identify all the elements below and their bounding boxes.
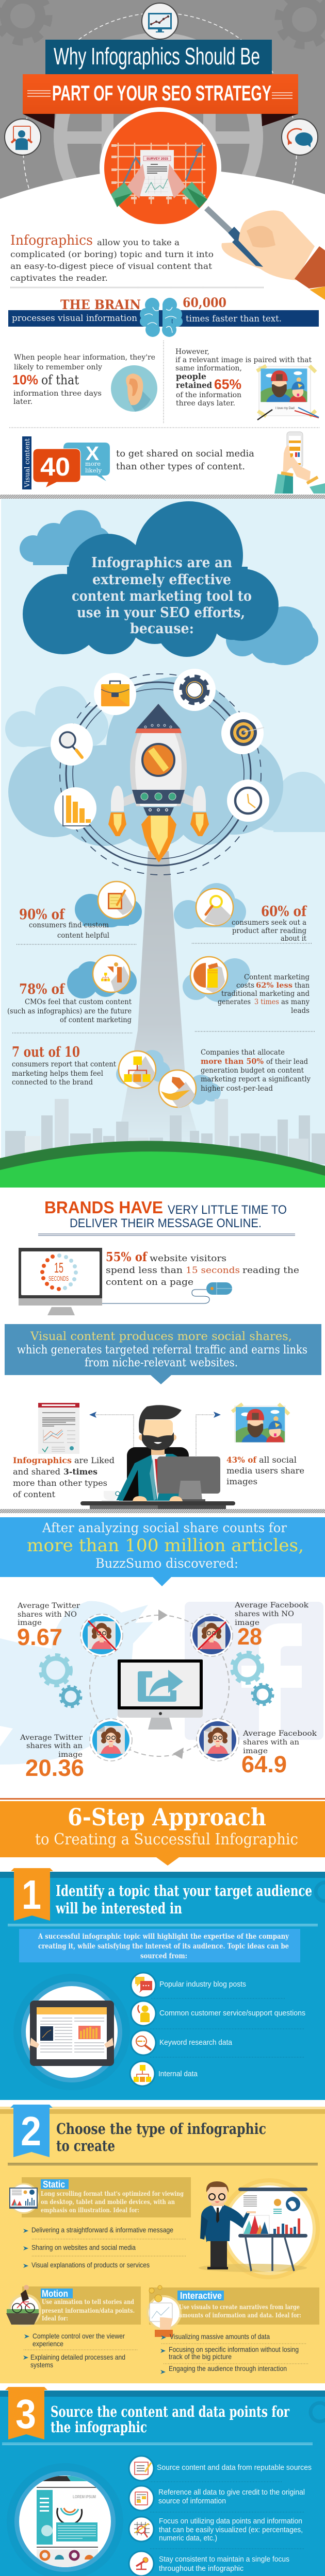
motion card: Use animation to tell stories and	[42, 2298, 134, 2306]
icon: chart magnifier	[134, 2522, 150, 2537]
interactive card: Interactive	[180, 2291, 222, 2301]
globe	[54, 33, 263, 180]
visual content 40x stat	[22, 436, 254, 489]
interactive card	[147, 2285, 319, 2337]
retention 65% text: same information,	[175, 364, 242, 372]
step 1 intro box: sourced from:	[140, 1952, 187, 1960]
infographics liked text: of content	[13, 1490, 56, 1499]
share counts: Average Twitter	[20, 1734, 83, 1742]
city skyline	[5, 1099, 325, 1167]
55% stat text: reading the	[242, 1265, 299, 1276]
stat: more than 50% budget: marketing report a significantly	[201, 1075, 311, 1083]
twitter and facebook watermarks	[0, 1601, 323, 1765]
step 3 panel	[0, 2387, 325, 2576]
stat: more than 50% budget: Companies that allocate	[201, 1048, 285, 1057]
icon: keyword magnifier	[136, 2036, 151, 2050]
static infographic card: Long scrolling format that's optimized for viewing	[41, 2190, 184, 2197]
intro paragraph: an easy-to-digest piece of visual content that	[10, 261, 213, 271]
stat: 62% less cost: 3 times	[254, 998, 279, 1006]
cloud heading: because:	[130, 621, 194, 637]
stat: 60% seek product: consumers seek out a	[232, 919, 306, 927]
icon: chat	[135, 1977, 152, 1993]
icon: gear	[173, 669, 216, 711]
BuzzSumo banner: more than 100 million articles,	[27, 1535, 304, 1556]
rocket body	[130, 704, 187, 806]
ribbon number 2	[10, 2105, 53, 2157]
static infographic card	[8, 2177, 191, 2217]
infographics liked text: Infographics	[13, 1455, 72, 1465]
list: topic sources: Internal data	[158, 2070, 198, 2078]
cloud and icon	[75, 882, 142, 927]
stat: more than 50% budget: of their lead	[266, 1058, 308, 1066]
icon: person at screen	[5, 119, 41, 155]
motion card	[6, 2285, 141, 2327]
share counts: Average Twitter	[17, 1602, 80, 1610]
step 1 panel	[0, 1868, 325, 2100]
intro paragraph: captivates the reader.	[10, 273, 108, 283]
rocket	[108, 704, 209, 862]
BuzzSumo banner: After analyzing social share counts for	[42, 1520, 287, 1535]
stat: 7 out of 10: consumers report that content	[12, 1060, 116, 1069]
BuzzSumo banner	[0, 1517, 325, 1586]
icon: bar chart	[54, 787, 96, 829]
visual content 40x stat: likely	[85, 467, 102, 474]
the brain stat: times faster than text.	[186, 314, 282, 324]
step 3 heading: the infographic	[51, 2418, 147, 2436]
stat: 78% CMOs: of content marketing	[60, 1016, 132, 1024]
motion and interactive bullets: systems	[30, 2361, 53, 2369]
43% text: 43% of	[226, 1455, 257, 1465]
motion and interactive bullets: Visualizing massive amounts of data	[170, 2332, 270, 2341]
list: topic sources	[130, 1973, 305, 2086]
social shares banner: from niche-relevant websites.	[85, 1357, 238, 1369]
icon: support person	[138, 2005, 150, 2022]
list: topic sources: Keyword research data	[159, 2038, 233, 2047]
55% stat text: 15 seconds	[186, 1265, 240, 1276]
infographics liked text: 3-times	[63, 1467, 98, 1477]
document illustration: LOREM IPSUM	[73, 2495, 96, 2499]
motion and interactive bullets	[23, 2332, 308, 2374]
share counts: image	[58, 1751, 83, 1759]
green hill	[0, 1141, 325, 1188]
motion and interactive bullets: experience	[32, 2340, 63, 2348]
the brain stat: processes visual information	[12, 313, 137, 324]
list: sourcing tips: Reference all data to give credit to the original	[158, 2488, 305, 2497]
stat: more than 50% budget: generation budget on content	[201, 1066, 304, 1075]
retention 10% text	[12, 353, 155, 406]
stat: 62% less cost: than	[295, 981, 310, 990]
list: sourcing tips: source of information	[158, 2497, 226, 2505]
main cloud	[23, 501, 279, 657]
title banner: blue	[45, 40, 272, 74]
orbit rings	[60, 674, 261, 875]
stat: 90% custom content: content helpful	[57, 931, 109, 940]
stat: 62% less cost: costs	[236, 981, 254, 990]
list: sourcing tips: Stay consistent to maintain a single focus	[159, 2555, 289, 2564]
icon: family photo	[232, 1404, 289, 1443]
stat: 62% less cost: traditional marketing and	[221, 990, 310, 998]
static bullets: Delivering a straightforward & informative message	[31, 2226, 173, 2234]
icon: magnifier	[51, 723, 93, 766]
stat: 78% CMOs	[7, 955, 137, 1024]
list: sourcing tips: Source content and data from reputable sources	[157, 2463, 312, 2472]
share counts: shares with an	[243, 1738, 299, 1747]
portrait: twitter with image	[90, 1719, 132, 1761]
ribbon number 1: 1	[22, 1872, 41, 1918]
step 3 heading	[51, 2403, 290, 2436]
55% stat text: 55% of	[106, 1249, 148, 1264]
retention 10% text: later.	[13, 398, 32, 406]
43% text	[226, 1455, 304, 1486]
the brain stat: THE BRAIN	[60, 297, 141, 312]
retention 65% text: retained	[176, 380, 212, 390]
white hill	[0, 169, 325, 309]
infographics liked text: and shared	[13, 1467, 60, 1477]
title banner folds	[23, 114, 298, 129]
motion card: present information/data points.	[42, 2307, 135, 2314]
list: sourcing tips: throughout the infographic	[159, 2564, 243, 2573]
share counts: 9.67	[17, 1624, 62, 1650]
retention 10% text: likely to remember only	[14, 363, 102, 371]
motion card: Ideal for:	[42, 2314, 68, 2322]
intro paragraph: Infographics	[10, 233, 93, 248]
ribbon number 1	[11, 1868, 53, 1921]
icon: briefcase	[94, 673, 136, 715]
list: topic sources: Common customer service/support questions	[159, 2009, 305, 2018]
share counts: 64.9	[241, 1751, 287, 1777]
social shares banner	[5, 1324, 321, 1384]
stat: 60% seek product: 60% of	[261, 904, 307, 920]
cloud heading: content marketing tool to	[72, 588, 252, 604]
stat: 60% seek product	[174, 883, 307, 943]
hands holding paper	[126, 164, 186, 198]
stat: 62% less cost: leads	[291, 1007, 310, 1015]
intro paragraph: allow you to take a	[97, 238, 180, 247]
intro paragraph	[10, 233, 214, 283]
infographics liked text: are Liked	[74, 1456, 115, 1465]
retention 65% text: of the information	[176, 391, 241, 399]
icon: ear	[111, 365, 157, 412]
share counts: Average Facebook	[242, 1730, 317, 1738]
icon: monitor chart	[142, 3, 178, 39]
stat: more than 50% budget: higher cost-per-lead	[201, 1084, 273, 1093]
step 1 heading	[55, 1882, 312, 1917]
chart grid	[115, 143, 205, 204]
step 2 heading	[56, 2120, 266, 2155]
portrait: facebook no image	[190, 1614, 233, 1656]
portrait: facebook with image	[197, 1719, 239, 1761]
visual content 40x stat: to get shared on social media	[116, 448, 254, 459]
dashed cycle with arrows	[90, 1609, 229, 1759]
flame	[141, 816, 176, 862]
stat: 62% less cost: generates	[218, 998, 251, 1006]
cloud heading: extremely effective	[92, 572, 231, 588]
icon: speech bubbles	[282, 119, 318, 155]
static infographic card: Static	[43, 2179, 65, 2190]
motion and interactive bullets: Focusing on specific information without losing	[169, 2345, 299, 2353]
step 2 panel	[0, 2105, 325, 2383]
static bullets: Visual explanations of products or services	[31, 2261, 150, 2269]
55% stat text: content on a page	[106, 1277, 193, 1287]
stat: 60% seek product: product after reading	[232, 927, 306, 935]
list: sourcing tips: numeric data, etc.)	[159, 2534, 217, 2543]
brands heading	[44, 1198, 287, 1230]
dashed orbit	[23, 13, 297, 286]
stat: 90% custom content	[19, 882, 142, 940]
retention 65% text: people	[176, 371, 206, 381]
brands heading: DELIVER THEIR MESSAGE ONLINE.	[70, 1216, 262, 1230]
icon: brain	[140, 298, 183, 337]
trend arrows	[123, 147, 200, 183]
drawing of dad and child: I love my Dad	[275, 407, 295, 410]
55% stat text: spend less than	[106, 1265, 183, 1276]
stat: 62% less cost	[183, 957, 310, 1015]
retention 65% text: However,	[175, 348, 209, 356]
cloud heading: use in your SEO efforts,	[77, 605, 245, 621]
split divider	[163, 341, 164, 423]
cloud heading	[72, 555, 252, 637]
static bullets	[23, 2226, 186, 2269]
visual content 40x stat: X	[86, 443, 100, 465]
clouds top	[20, 501, 318, 665]
hand holding magnifier	[221, 210, 325, 300]
motion card: Motion	[42, 2289, 68, 2299]
retention 10% text: 10%	[12, 372, 38, 387]
retention 65% text	[175, 348, 312, 408]
retention 10% text: When people hear information, they're	[14, 353, 155, 362]
motion and interactive bullets: Engaging the audience through interaction	[169, 2364, 287, 2372]
the brain stat	[8, 295, 319, 337]
retention 65% text: if a relevant image is paired with that	[175, 356, 312, 364]
ribbon number 3	[5, 2387, 47, 2439]
visual content 40x stat: more	[85, 461, 101, 467]
6-step banner: to Creating a Successful Infographic	[35, 1831, 298, 1849]
static bullets: Sharing on websites and social media	[31, 2243, 136, 2251]
motion and interactive bullets: Complete control over the viewer	[32, 2332, 125, 2340]
share counts: image	[235, 1619, 259, 1627]
static infographic card: emphasis on illustration. Ideal for:	[41, 2206, 139, 2214]
icon: paper pencil	[135, 2462, 151, 2475]
icon: infographic document	[38, 1403, 79, 1454]
icon: hands with phone	[274, 432, 325, 494]
stat: 7 out of 10: 7 out of 10	[12, 1044, 80, 1060]
retention 10% text: of that	[41, 372, 79, 387]
stat: more than 50% budget	[159, 1048, 311, 1108]
step 1 heading: will be interested in	[55, 1900, 182, 1917]
static infographic card: on desktop, tablet and mobile devices, with an	[41, 2198, 175, 2206]
cloud heading: Infographics are an	[91, 555, 232, 571]
share counts: shares with NO	[18, 1611, 77, 1619]
side boosters	[108, 786, 209, 836]
motion and interactive bullets: track of the big picture	[169, 2352, 232, 2361]
share counts: image	[18, 1619, 42, 1627]
social shares banner: Visual content produces more social shares,	[30, 1330, 292, 1343]
clouds behind rocket	[5, 677, 325, 848]
share counts: shares with an	[26, 1742, 83, 1750]
share counts: 28	[237, 1623, 262, 1650]
stat: 60% seek product: about it	[281, 935, 306, 943]
visual content 40x stat: 40	[40, 452, 70, 481]
magnifier handle	[204, 206, 263, 264]
drawing of dad and child	[257, 366, 319, 420]
share counts: 20.36	[25, 1755, 84, 1781]
infographics liked text	[13, 1455, 115, 1499]
icon: clock	[227, 779, 269, 822]
visual content 40x stat: than other types of content.	[116, 461, 245, 472]
infographics liked text: more than other types	[13, 1479, 107, 1488]
tablet illustration	[21, 1981, 122, 2082]
icon: org chart	[134, 2065, 151, 2082]
retention 65% text: 65%	[214, 377, 241, 392]
BuzzSumo banner: BuzzSumo discovered:	[95, 1556, 238, 1571]
stat: 7 out of 10: marketing helps them feel	[12, 1070, 103, 1078]
rocket section background	[1, 499, 325, 1188]
stat: 90% custom content: consumers find custom	[29, 921, 109, 929]
icon: article	[135, 2492, 148, 2505]
list: sourcing tips	[129, 2456, 312, 2576]
list: sourcing tips: that can be easily visualized (ex: percentages,	[159, 2526, 303, 2534]
step 2 heading: Choose the type of infographic	[56, 2120, 266, 2138]
list: sourcing tips: Focus on utilizing data points and information	[159, 2517, 302, 2526]
background gears	[0, 0, 325, 45]
retention 65% text: three days later.	[176, 399, 235, 408]
icon: monitor 15 seconds: 15	[54, 1260, 63, 1276]
43% text: all social	[259, 1455, 297, 1465]
step 2 heading: to create	[56, 2137, 115, 2155]
icon: monitor 15 seconds: SECONDS	[48, 1275, 69, 1282]
stat: 7 out of 10: connected to the brand	[12, 1078, 93, 1087]
presenter illustration	[199, 2178, 320, 2279]
dotted arrows	[89, 1412, 221, 1455]
survey paper: SURVEY 2015	[147, 158, 169, 161]
6-step banner	[0, 1798, 325, 1866]
step 1 intro box	[19, 1929, 300, 1962]
ribbon number 2: 2	[21, 2108, 41, 2154]
stat: 62% less cost: as many	[281, 998, 310, 1006]
stat: more than 50% budget: more than 50%	[201, 1057, 264, 1066]
share counts: image	[243, 1747, 268, 1755]
document illustration	[14, 2471, 116, 2572]
43% text: media users share	[226, 1466, 304, 1476]
motion and interactive bullets: Explaining detailed processes and	[30, 2353, 125, 2361]
6-step banner: 6-Step Approach	[68, 1803, 266, 1831]
share monitor	[118, 1659, 203, 1730]
the brain stat: 60,000	[183, 295, 226, 310]
share counts: shares with NO	[235, 1610, 294, 1618]
43% text: images	[226, 1477, 257, 1486]
share counts	[17, 1601, 317, 1781]
share counts: Average Facebook	[234, 1601, 309, 1609]
hero section	[0, 0, 325, 309]
55% stat text	[106, 1249, 299, 1287]
brands heading: BRANDS HAVE	[44, 1198, 163, 1217]
retention 10% text: information three days	[13, 389, 102, 398]
man at desk	[80, 1405, 235, 1509]
stat: 78% CMOs: (such as infographics) are the future	[7, 1007, 132, 1015]
stat: 78% CMOs: CMOs feel that custom content	[25, 998, 132, 1006]
portrait: twitter no image	[80, 1614, 123, 1656]
visual content 40x stat: Visual content	[24, 438, 31, 488]
smoke trail	[113, 851, 206, 1164]
intro paragraph: complicated (or boring) topic and turn it into	[10, 249, 214, 259]
stat: 62% less cost: 62% less	[256, 981, 293, 990]
decorative gears	[40, 1652, 273, 1707]
stat: 78% CMOs: 78% of	[19, 981, 66, 997]
stat: 90% custom content: 90% of	[19, 907, 66, 923]
icon: monitor 15 seconds	[19, 1248, 232, 1315]
brands heading: VERY LITTLE TIME TO	[168, 1203, 287, 1217]
icon: target	[221, 712, 264, 754]
title banner: orange	[23, 74, 298, 114]
stat: 62% less cost: Content marketing	[244, 973, 310, 981]
ribbon number 3: 3	[15, 2391, 36, 2437]
survey paper	[140, 150, 174, 196]
stat: 7 out of 10	[12, 1044, 170, 1088]
list: topic sources: Popular industry blog posts	[159, 1980, 246, 1989]
icon: microphone	[136, 2557, 148, 2569]
55% stat text: website visitors	[150, 1253, 226, 1264]
magnifier lens	[100, 107, 221, 229]
